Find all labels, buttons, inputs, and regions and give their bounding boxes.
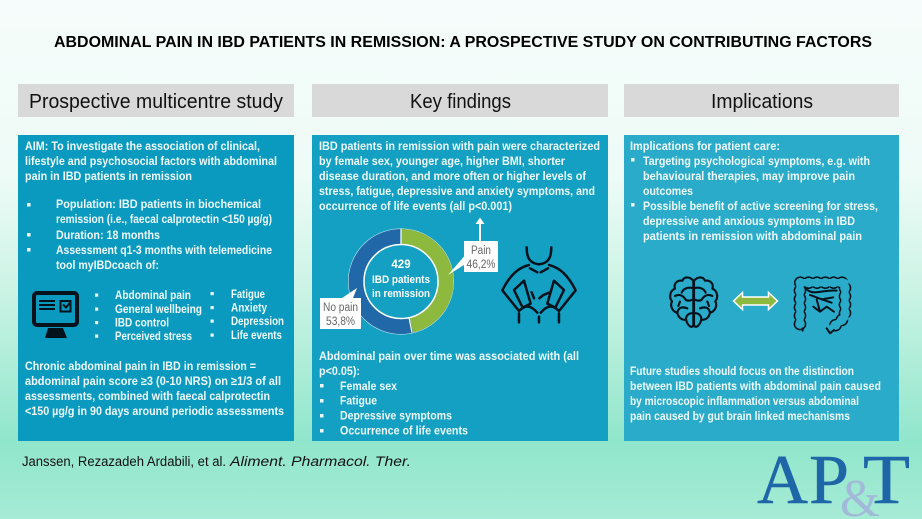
definition of chronic abdominal pain: assessments, combined with faecal calprotectin <box>25 390 270 403</box>
implications for patient care: outcomes <box>643 185 693 198</box>
assessment items column 1: IBD control <box>115 316 169 330</box>
findings text: IBD patients in remission with pain were characterized <box>319 140 600 153</box>
callout: no pain 53,8%: No pain <box>323 302 358 314</box>
definition of chronic abdominal pain: Chronic abdominal pain in IBD in remission = <box>25 360 256 373</box>
implications for patient care: depressive and anxious symptoms in IBD <box>643 215 855 228</box>
pain over time text: Depressive symptoms <box>340 410 452 422</box>
study details list: Population: IBD patients in biochemical <box>56 198 261 211</box>
study aim: pain in IBD patients in remission <box>25 170 192 183</box>
panel: key findings <box>312 135 608 441</box>
assessment items column 1: Perceived stress <box>115 330 192 343</box>
logo: AP&T: P <box>809 442 849 519</box>
heading: prospective multicentre study <box>18 84 294 117</box>
pain over time text: Fatigue <box>340 394 377 408</box>
study details list: tool myIBDcoach of: <box>56 259 159 272</box>
logo: AP&T: T <box>863 442 910 519</box>
future research text: pain caused by gut brain linked mechanisms <box>630 410 850 423</box>
implications for patient care: Implications for patient care: <box>630 140 780 153</box>
logo: AP&T <box>757 442 910 519</box>
definition of chronic abdominal pain: abdominal pain score ≥3 (0-10 NRS) on ≥1/3 of all <box>25 375 281 388</box>
citation: Janssen, Rezazadeh Ardabili, et al. <box>22 454 226 469</box>
arrow: bidirectional gut-brain link <box>734 292 778 310</box>
arrow: pain upward <box>476 218 484 241</box>
callout: pain 46,2%: Pain <box>471 245 491 257</box>
definition of chronic abdominal pain <box>25 360 284 418</box>
definition of chronic abdominal pain: <150 µg/g in 90 days around periodic assessments <box>25 405 284 418</box>
callout: no pain 53,8%: 53,8% <box>326 316 355 328</box>
callout: pain 46,2%: 46,2% <box>466 259 496 271</box>
study details list: remission (i.e., faecal calprotectin <150 µg/g) <box>56 213 272 226</box>
icon: torso with abdominal pain <box>502 247 576 322</box>
donut chart: pain vs no pain: 429 <box>391 259 411 271</box>
pain over time text: Female sex <box>340 380 397 393</box>
assessment items column 2: Depression <box>231 315 284 328</box>
study aim: AIM: To investigate the association of clinical, <box>25 140 260 153</box>
pain over time text: Abdominal pain over time was associated with (all <box>319 350 579 363</box>
pain over time text: p<0.05): <box>319 365 360 378</box>
implications for patient care: patients in remission with abdominal pain <box>643 230 862 243</box>
findings text: stress, fatigue, depressive and anxiety symptoms, and <box>319 185 595 198</box>
future research text: by microscopic inflammation versus abdominal <box>630 395 859 408</box>
donut chart: pain vs no pain: IBD patients <box>372 274 430 286</box>
implications for patient care: Possible benefit of active screening for stress, <box>643 200 878 213</box>
assessment items column 2: Anxiety <box>231 302 267 314</box>
implications for patient care: Targeting psychological symptoms, e.g. with <box>643 155 870 168</box>
pain over time text <box>319 350 579 438</box>
future research text: between IBD patients with abdominal pain caused <box>630 380 881 393</box>
study details list <box>27 198 272 272</box>
assessment items column 1 <box>95 289 202 343</box>
heading: key findings <box>312 84 608 117</box>
pain over time text: Occurrence of life events <box>340 424 468 438</box>
findings text: by female sex, younger age, higher BMI, shorter <box>319 155 565 168</box>
citation <box>22 454 411 469</box>
future research text: Future studies should focus on the distinction <box>630 365 854 378</box>
title: ABDOMINAL PAIN IN IBD PATIENTS IN REMISSION: A PROSPECTIVE STUDY ON CONTRIBUTING FACTORS <box>54 34 872 51</box>
findings text: occurrence of life events (all p<0.001) <box>319 200 512 213</box>
findings text: disease duration, and more often or higher levels of <box>319 170 586 183</box>
donut chart: pain vs no pain <box>348 228 454 334</box>
icon: computer monitor with checklist <box>34 293 77 338</box>
citation: Aliment. Pharmacol. Ther. <box>229 454 411 469</box>
panel: study design <box>18 135 294 441</box>
icon: brain <box>670 277 717 327</box>
study aim <box>25 140 277 183</box>
study details list: Assessment q1-3 months with telemedicine <box>56 244 272 257</box>
findings text <box>319 140 600 213</box>
assessment items column 2: Life events <box>231 329 282 342</box>
study aim: lifestyle and psychosocial factors with abdominal <box>25 155 277 168</box>
heading: key findings: Key findings <box>410 91 511 113</box>
heading: implications <box>624 84 899 117</box>
future research text <box>630 365 881 423</box>
heading: implications: Implications <box>711 91 813 113</box>
assessment items column 2: Fatigue <box>231 288 265 301</box>
panel: implications <box>624 135 899 441</box>
callout: pain 46,2% <box>448 241 498 275</box>
assessment items column 1: Abdominal pain <box>115 289 191 302</box>
donut chart: pain vs no pain: in remission <box>372 288 430 300</box>
callout: no pain 53,8% <box>320 288 361 329</box>
assessment items column 2 <box>210 288 284 342</box>
logo: AP&T: A <box>757 442 808 519</box>
implications for patient care <box>630 140 878 243</box>
heading: prospective multicentre study: Prospective multicentre study <box>29 91 283 113</box>
icon: intestines <box>800 283 845 333</box>
assessment items column 1: General wellbeing <box>115 303 202 316</box>
study details list: Duration: 18 months <box>56 229 160 242</box>
implications for patient care: behavioural therapies, may improve pain <box>643 170 855 183</box>
